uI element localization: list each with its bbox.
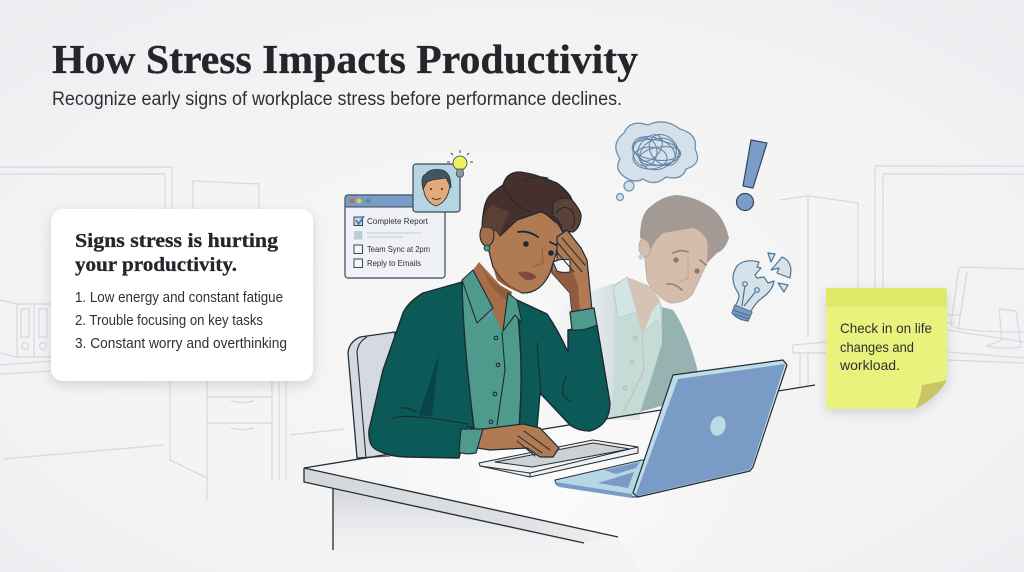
background office line art: right	[780, 166, 1024, 387]
neck	[473, 262, 512, 332]
avatar card	[413, 164, 460, 212]
card heading	[75, 230, 279, 276]
raised hand	[552, 230, 592, 313]
icon: lightbulb	[447, 150, 473, 177]
collar	[462, 270, 522, 331]
earring	[484, 245, 490, 251]
checked task: Complete Report	[367, 216, 429, 226]
icon: broken lightbulb	[732, 253, 791, 321]
icon: exclamation mark	[736, 140, 767, 210]
laptop	[555, 360, 787, 498]
face	[484, 205, 563, 293]
task: team sync: Team Sync at 2pm	[367, 244, 430, 254]
panel: task list window	[345, 195, 445, 278]
thought cloud with tangle	[616, 122, 698, 200]
sticky note text: workload.	[839, 357, 900, 373]
ear	[480, 224, 494, 246]
sticky note text: Check in on life	[840, 320, 932, 336]
keyboard	[479, 440, 638, 477]
sticky note text	[839, 320, 932, 373]
sticky note text: changes and	[840, 339, 914, 355]
raised cuff	[570, 308, 597, 330]
background office line art: left	[0, 167, 345, 500]
facial features	[518, 232, 560, 247]
card list	[75, 290, 287, 352]
shirt placket and buttons	[489, 332, 505, 425]
task: reply to emails: Reply to Emails	[367, 258, 421, 268]
jacket	[369, 282, 610, 458]
card list: 3. Constant worry and overthinking	[75, 336, 287, 352]
shirt	[460, 270, 522, 430]
resting cuff	[459, 429, 483, 454]
main figure: stressed worker	[369, 172, 638, 477]
resting hand	[475, 424, 559, 457]
laptop logo	[708, 414, 728, 438]
card heading: Signs stress is hurting	[75, 230, 279, 252]
card list: 1. Low energy and constant fatigue	[75, 290, 283, 306]
panel: signs of stress card	[51, 209, 313, 381]
hair	[482, 172, 581, 236]
placeholder task	[354, 231, 421, 240]
chair	[348, 332, 395, 458]
desk	[303, 384, 816, 550]
title: How Stress Impacts Productivity	[52, 36, 638, 82]
subtitle: Recognize early signs of workplace stress before performance declines.	[52, 89, 622, 110]
card heading: your productivity.	[75, 254, 237, 276]
callout: sticky note	[826, 288, 947, 409]
ghost figure: stressed reflection	[548, 195, 729, 420]
card list: 2. Trouble focusing on key tasks	[75, 313, 263, 329]
